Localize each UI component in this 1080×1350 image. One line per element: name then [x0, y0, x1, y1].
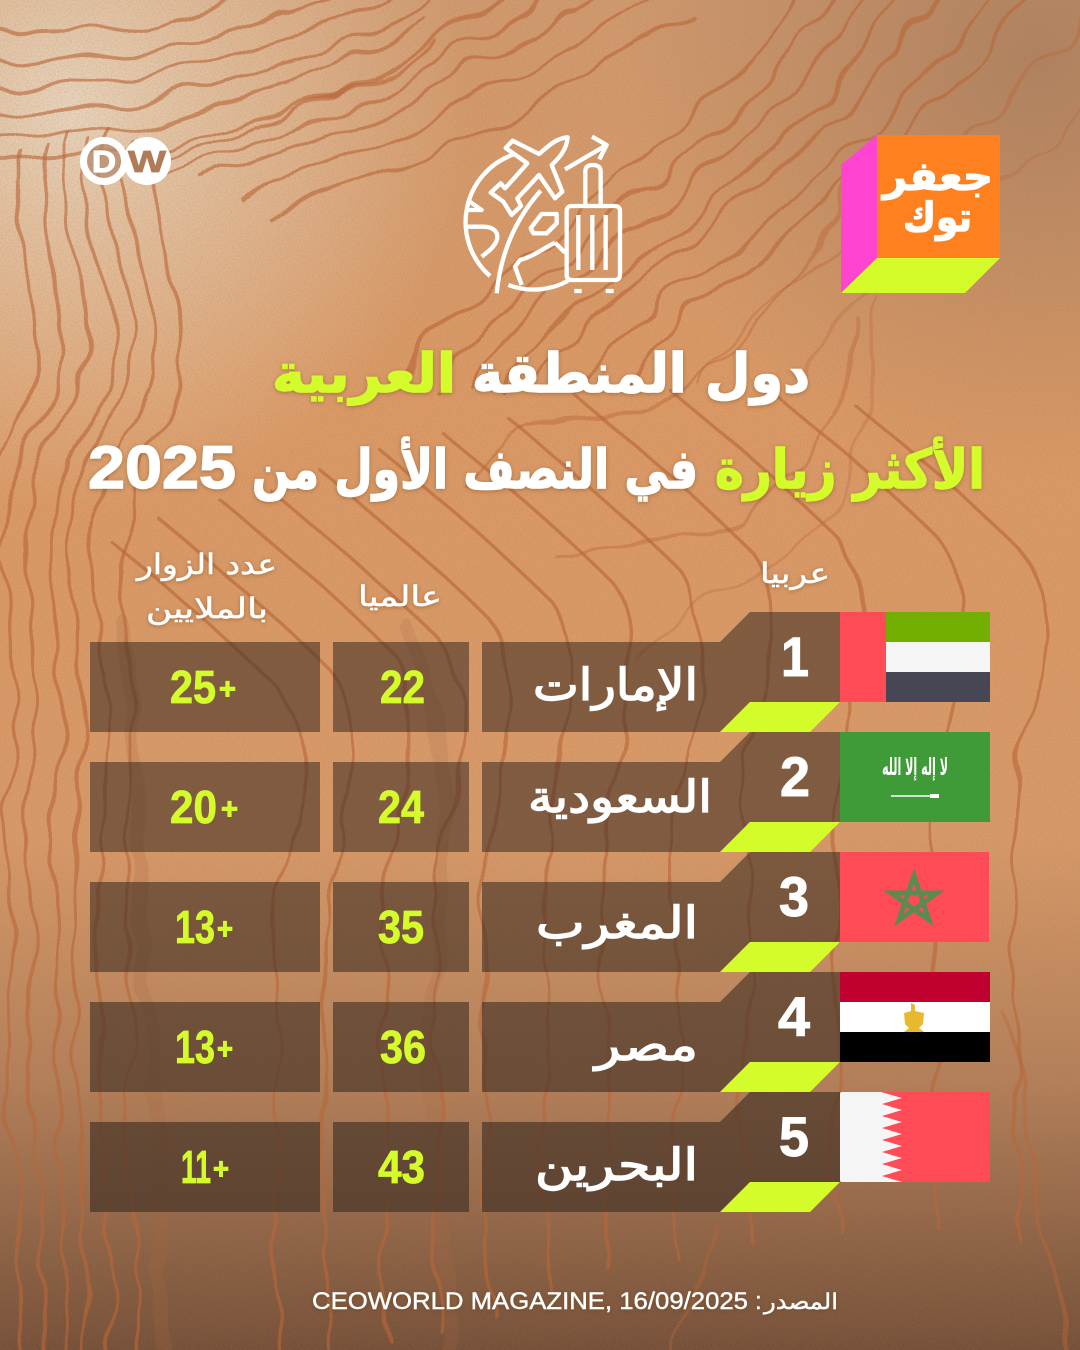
flag: Morocco [840, 852, 989, 942]
table row 2: Saudi Arabia: السعودية [528, 772, 712, 823]
table row 5: Bahrain: 43 [378, 1141, 425, 1193]
table row 3: Morocco: + [217, 913, 233, 946]
table row 1: UAE: 22 [380, 661, 425, 713]
title [88, 342, 985, 501]
table row 5: Bahrain: 5 [779, 1105, 809, 1168]
flag: Egypt [840, 972, 990, 1062]
column headers: بالملايين [146, 592, 268, 625]
table row 2: Saudi Arabia: 2 [780, 745, 810, 808]
table row 3: Morocco: 35 [378, 901, 424, 953]
table row 1: UAE [90, 612, 990, 732]
table row 4: Egypt [90, 972, 990, 1092]
source line: CEOWORLD MAGAZINE, 16/09/2025 [312, 1288, 748, 1315]
column headers: عربيا [760, 557, 830, 590]
source line: : [755, 1288, 762, 1315]
table row 2: Saudi Arabia: 20 [170, 781, 217, 833]
table row 2: Saudi Arabia: + [221, 793, 238, 826]
table row 1: UAE: 25 [170, 661, 216, 713]
logo: DW [84, 137, 171, 185]
table row 1: UAE: الإمارات [533, 660, 698, 711]
table row 4: Egypt: مصر [593, 1020, 698, 1071]
table row 4: Egypt: 36 [380, 1021, 426, 1073]
title: دول المنطقة [472, 342, 810, 405]
title: العربية [272, 342, 456, 405]
table row 1: UAE: + [219, 673, 236, 706]
table row 3: Morocco [90, 852, 989, 972]
table row 3: Morocco: 3 [779, 865, 809, 928]
flag: Saudi Arabia: لا إله إلا الله [882, 753, 948, 781]
column headers: عدد الزوار [135, 548, 277, 581]
table row 5: Bahrain: + [213, 1153, 229, 1186]
flag: Bahrain [840, 1092, 990, 1182]
logo: programme cube [841, 135, 1000, 294]
flag: Saudi Arabia [840, 732, 990, 822]
table row 3: Morocco: المغرب [536, 898, 698, 949]
table row 2: Saudi Arabia [90, 732, 990, 852]
table row 4: Egypt: + [217, 1033, 233, 1066]
table row 3: Morocco: 13 [175, 901, 215, 953]
table row 5: Bahrain: 11 [181, 1141, 211, 1193]
logo: DW: D [92, 144, 116, 179]
table row 5: Bahrain [90, 1092, 990, 1212]
table row 2: Saudi Arabia: 24 [378, 781, 424, 833]
column headers: عالميا [358, 580, 442, 613]
table row 5: Bahrain: البحرين [535, 1140, 698, 1191]
title: الأكثر زيارة [715, 437, 985, 501]
logo: programme cube: توك [903, 195, 972, 241]
logo: DW: W [128, 144, 167, 179]
table row 4: Egypt: 4 [778, 985, 810, 1048]
flag: UAE [840, 612, 990, 702]
title: 2025 [88, 434, 236, 501]
column headers [135, 548, 830, 625]
table row 1: UAE: 1 [781, 625, 809, 688]
logo: programme cube: جعفر [881, 154, 993, 200]
source line: المصدر [763, 1290, 838, 1315]
icon: globe, plane and suitcase [466, 137, 620, 293]
table row 4: Egypt: 13 [175, 1021, 215, 1073]
title: في النصف الأول من [252, 437, 698, 501]
